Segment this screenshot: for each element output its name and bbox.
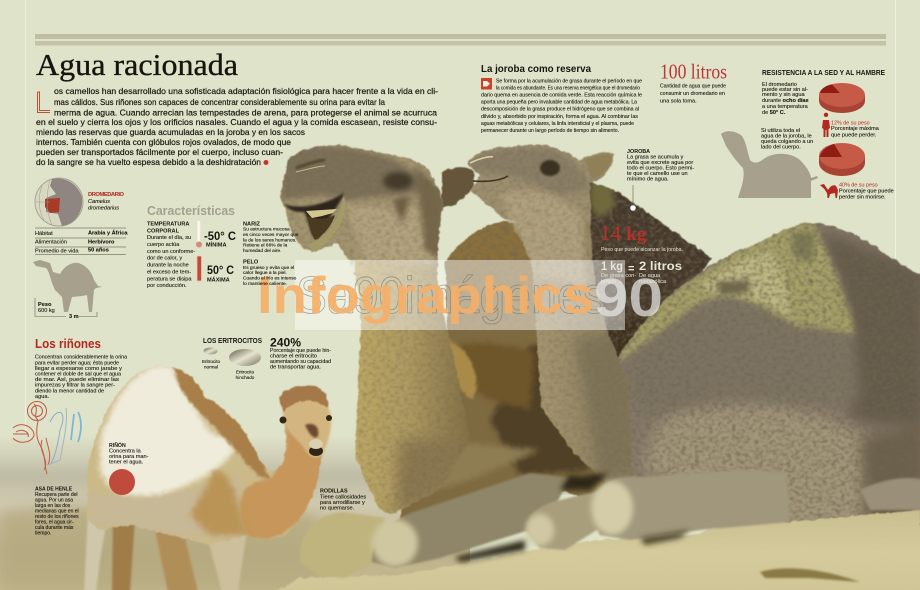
panel: species card: Alimentación xyxy=(35,240,67,246)
stat: 14 kg: De grasa con- xyxy=(601,273,636,279)
text: eight days: durante ocho días xyxy=(762,98,809,104)
stat: 100 litros: consumir un dromedario en xyxy=(660,91,725,97)
neck xyxy=(240,420,325,540)
text: eight days: puede estar sin al- xyxy=(762,87,808,93)
panel: la joroba como reserva: descomposición de la grasa produce el hidrógeno que se combina al xyxy=(481,107,639,113)
panel: la joroba como reserva: Se forma por la acumulación de grasa durante el período en que xyxy=(496,78,642,84)
asa de henle note: ASA DE HENLE xyxy=(35,486,73,492)
icon: dromedary silhouette xyxy=(33,260,102,312)
asa de henle note: larga en las dos xyxy=(35,503,71,509)
riñón note xyxy=(109,441,149,466)
riñón note: RIÑÓN xyxy=(109,441,126,449)
title: Agua racionada xyxy=(36,48,238,82)
icon: red camel xyxy=(820,184,838,198)
icon: swollen erythrocyte xyxy=(229,349,261,366)
icon: arrow marker xyxy=(481,78,492,90)
asa de henle note: agua. Por un asa xyxy=(35,498,73,504)
nariz note: Retiene el 66% de la xyxy=(243,242,288,248)
body temperature text: por conducción. xyxy=(147,283,187,289)
panel: species card: Arabia y África xyxy=(88,230,128,236)
head xyxy=(282,394,331,458)
right camel neck and head xyxy=(460,140,635,490)
nariz note: la de los seres humanos. xyxy=(243,237,296,243)
text: 40% xyxy=(839,182,894,200)
stat: 14 kg: De agua xyxy=(639,273,661,279)
body temperature text: peratura se disipa xyxy=(147,276,192,282)
stat: 14 kg: 2 litros xyxy=(639,261,682,273)
kidney text: para evitar perder agua; ésta puede xyxy=(35,360,119,366)
body temperature text: Durante el día, su xyxy=(147,235,191,241)
riñón note: orina para man- xyxy=(109,454,149,460)
left camel ear tuft xyxy=(442,167,475,208)
panel: resistencia a la sed y al hambre: RESISTENCIA A LA SED Y AL HAMBRE xyxy=(762,70,885,77)
intro text block: do la sangre se ha vuelto espesa debido a la deshidratación xyxy=(36,157,261,167)
panel: la joroba como reserva: permanecer durante un largo período de tiempo sin alimento. xyxy=(481,128,619,134)
asa de henle note: tiempo. xyxy=(35,530,51,536)
panel: características xyxy=(147,204,299,289)
stat: 100 litros: 100 litros xyxy=(660,60,727,84)
stat: 100 litros: una sola toma. xyxy=(660,98,697,104)
panel: los eritrocitos: 240% xyxy=(270,336,301,350)
body temperature text xyxy=(147,222,195,289)
stat: 14 kg: = xyxy=(628,263,634,275)
text: 12% xyxy=(831,120,880,138)
asa de henle note: fores, el agua cir- xyxy=(35,520,74,526)
right camel eye xyxy=(540,160,560,176)
stat: 14 kg: tenida xyxy=(601,279,617,285)
kidney text: Concentran considerablemente la orina xyxy=(35,355,128,361)
panel: los eritrocitos: Eritrocito xyxy=(236,370,255,374)
thermometer: maximum xyxy=(197,256,234,284)
text: eight days: a una temperatura xyxy=(762,104,809,110)
panel: los eritrocitos: normal xyxy=(204,364,218,370)
panel: species card: Peso xyxy=(38,302,52,308)
thermometer: maximum: 50° C xyxy=(207,265,234,277)
left camel nostril xyxy=(296,160,325,168)
pie chart: 40% xyxy=(819,143,865,176)
thermometer: minimum xyxy=(196,221,236,248)
panel: los eritrocitos: hinchado xyxy=(236,375,255,380)
joroba note: La grasa se acumula y xyxy=(627,154,683,160)
kidney text: de mar. Así, puede eliminar las xyxy=(35,377,119,383)
text: 40%: perder sin morirse. xyxy=(839,194,886,200)
body temperature text: como un conforme- xyxy=(147,249,195,255)
icon: human xyxy=(822,113,830,137)
text: 12%: que puede perder. xyxy=(831,132,877,138)
panel: los eritrocitos xyxy=(202,336,331,380)
pointer: joroba xyxy=(630,185,636,211)
panel: la joroba como reserva: La joroba como reserva xyxy=(481,63,591,75)
forelock xyxy=(279,386,328,412)
panel: species card: DROMEDARIO xyxy=(88,192,124,198)
icon: globe xyxy=(35,178,83,226)
nariz note: humedad del aire. xyxy=(243,248,281,254)
panel: species card: Promedio de vida xyxy=(35,248,79,254)
stat: 14 kg: 1 kg xyxy=(601,261,623,273)
watermark: 90 xyxy=(594,268,663,328)
pelo note: lo mantiene caliente. xyxy=(243,281,287,287)
panel: resistencia a la sed y al hambre xyxy=(721,70,894,200)
legs xyxy=(84,510,247,590)
thermometer: maximum: MÁXIMA xyxy=(207,276,230,284)
nariz note: NARIZ xyxy=(243,222,261,228)
rodillas note: no quemarse. xyxy=(320,506,355,512)
text: eight days: mento y sin agua xyxy=(762,92,805,98)
intro text block: os camellos han desarrollado una sofisticada adaptación fisiológica para hacer frente a la vida en cli- xyxy=(54,86,438,96)
nariz note: es cinco veces mayor que xyxy=(243,232,299,238)
text: hump use: lado del cuerpo. xyxy=(761,144,801,150)
joroba note: te que el camello use un xyxy=(627,171,688,177)
text: 12%: 12% de su peso xyxy=(831,120,870,126)
pelo note: PELO xyxy=(243,260,259,266)
eyes and muzzle xyxy=(280,415,332,456)
pelo note: Es grueso y evita que el xyxy=(243,265,294,271)
watermark: Infographics xyxy=(257,267,594,325)
right camel ear xyxy=(585,153,612,180)
icon: normal erythrocyte xyxy=(204,348,218,354)
asa de henle note: medianas que en el xyxy=(35,508,79,514)
body temperature text: cuerpo actúa xyxy=(147,242,180,248)
intro text block: en el suelo y cierra los ojos y los orificios nasales. Cuando el agua y la comida escasean, resiste consu- xyxy=(36,117,437,127)
pelo note: Cuando el frío es intenso xyxy=(243,276,297,282)
body temperature text: dor de calor, y xyxy=(147,256,182,262)
heading: Los riñones xyxy=(35,337,101,351)
photo: two resting camels xyxy=(270,140,920,590)
text: eight days xyxy=(762,82,809,116)
hump of the left camel xyxy=(444,182,712,358)
icon: camel with drooping hump xyxy=(721,131,818,198)
white fleece xyxy=(100,365,236,498)
diagram: nephron xyxy=(13,402,81,474)
left camel neck and head xyxy=(275,140,475,520)
riñón note: Concentra la xyxy=(109,448,142,454)
panel: los eritrocitos: Eritrocito xyxy=(202,359,221,364)
drop cap xyxy=(38,92,50,112)
kidney text: agua. xyxy=(35,394,49,400)
panel: species card: Herbívoro xyxy=(88,240,115,246)
intro text block xyxy=(36,86,438,167)
body temperature text: durante la noche xyxy=(147,263,189,269)
heading: Características xyxy=(147,204,235,218)
rodillas note: para arrodillarse y xyxy=(320,500,365,506)
stat: 100 litros xyxy=(660,60,727,104)
text: hump use: queda colgando a un xyxy=(761,139,813,145)
text: 12%: Porcentaje máxima xyxy=(831,126,880,132)
intro text block: internos. También cuenta con glóbulos rojos ovalados, de modo que xyxy=(36,137,291,147)
joroba note: todo el cuerpo. Esto permi- xyxy=(627,166,694,172)
text: hump use: Si utiliza toda el xyxy=(761,128,800,134)
kidney text xyxy=(35,355,128,400)
rodillas note: Tiene callosidades xyxy=(320,494,366,500)
knees and legs xyxy=(300,470,920,578)
kidney text: impurezas y filtrar la sangre per- xyxy=(35,383,115,389)
text: hump use xyxy=(761,128,813,150)
watermark: Sa90imágenes xyxy=(296,267,606,325)
riñón note: tener el agua. xyxy=(109,460,144,466)
right camel mouth xyxy=(473,176,508,181)
intro text block: merma de agua. Cuando arrecian las tempestades de arena, para protegerse el animal se acurruca xyxy=(54,108,437,118)
panel: los eritrocitos: aumentando su capacidad xyxy=(270,359,331,365)
left camel eye xyxy=(383,172,413,190)
text: hump use: agua de la joroba, le xyxy=(761,134,812,140)
stat: 14 kg: metabólica xyxy=(639,279,667,285)
body of the left camel xyxy=(400,330,610,520)
panel: species card: 3 m xyxy=(69,314,79,320)
joroba note: JOROBA xyxy=(627,149,650,155)
panel: los eritrocitos: charse el eritrocito xyxy=(270,354,317,360)
text: 40%: Porcentaje que puede xyxy=(839,188,894,194)
nariz note xyxy=(243,222,299,254)
body of the right camel xyxy=(618,222,920,526)
photo: young camel xyxy=(80,360,332,590)
panel: species card: dromedarius xyxy=(88,206,119,212)
text: eight days: El dromedario xyxy=(762,82,797,88)
intro text block: pueden ser transportados fácilmente por el cuerpo, incluso cuan- xyxy=(36,147,283,157)
thermometer: minimum: MÍNIMA xyxy=(206,240,227,248)
left camel mouth xyxy=(284,193,344,240)
panel: la joroba como reserva: dario quema en ausencia de comida verde. Esta reacción química le xyxy=(481,92,642,98)
kidney text: diendo la menor cantidad de xyxy=(35,388,104,394)
thermometer: minimum: -50° C xyxy=(204,231,236,243)
asa de henle note: cula durante más xyxy=(35,525,74,531)
intro text block: miendo las reservas que guarda acumuladas en la joroba y en los sacos xyxy=(36,127,305,137)
asa de henle note: Recupera parte del xyxy=(35,492,78,498)
body temperature text: el exceso de tem- xyxy=(147,269,191,275)
icon: kidney marker xyxy=(109,469,135,495)
panel: la joroba como reserva xyxy=(481,63,642,134)
panel: species card: Hábitat xyxy=(35,231,53,237)
panel: los riñones xyxy=(13,337,149,536)
asa de henle note xyxy=(35,486,79,536)
background: desert haze and ground xyxy=(0,435,470,590)
panel: los eritrocitos: de transportar agua. xyxy=(270,364,321,370)
panel: la joroba como reserva: aguas metabólicas y celulares, la linfa intersticial y el plasma, puede xyxy=(481,121,634,127)
joroba note: mínimo de agua. xyxy=(627,176,669,182)
pelo note xyxy=(243,260,297,287)
panel: la joroba como reserva: dilvido y, absorbido por inspiración, forma el agua. Al combinar las xyxy=(481,114,638,120)
rodillas note xyxy=(320,488,366,512)
joroba note: evita que excrete agua por xyxy=(627,160,693,166)
panel: los eritrocitos: LOS ERITROCITOS xyxy=(203,338,262,345)
joroba note xyxy=(627,149,694,182)
body temperature text: TEMPERATURA xyxy=(147,222,189,228)
nariz note: Su estructura mucosa xyxy=(243,227,290,233)
panel: species card: 50 años xyxy=(88,248,109,254)
asa de henle note: resto de los riñones xyxy=(35,514,79,520)
panel: la joroba como reserva: la comida es abundante. Es una reserva energética que el dromedario xyxy=(496,85,640,91)
body temperature text: CORPORAL xyxy=(147,228,180,234)
pelo note: calor llegue a la piel. xyxy=(243,270,287,276)
stat: 14 kg: 14 kg xyxy=(600,221,647,245)
rodillas note: RODILLAS xyxy=(320,488,348,494)
text: 40%: 40% de su peso xyxy=(839,182,878,188)
text: eight days: de 50° C. xyxy=(762,110,786,116)
panel: species card: Camelus xyxy=(88,199,110,205)
sand xyxy=(270,510,920,590)
stat: 14 kg: Peso que puede alcanzar la joroba. xyxy=(601,247,683,253)
brown back xyxy=(173,365,270,480)
panel: species card xyxy=(33,178,128,320)
panel: la joroba como reserva: aporta una pequeña pero invaluable cantidad de agua metabólica. La xyxy=(481,100,638,106)
kidney text: llegar a espesarse como jarabe y xyxy=(35,366,122,372)
intro text block: mas cálidos. Sus riñones son capaces de concentrar considerablemente su orina para evitar la xyxy=(54,97,385,107)
stat: 14 kg xyxy=(600,221,683,285)
pie chart: 12% xyxy=(819,83,865,113)
stat: 100 litros: Cantidad de agua que puede xyxy=(660,84,726,90)
panel: los eritrocitos: Porcentaje que puede hin- xyxy=(270,348,331,354)
panel: species card: 600 kg xyxy=(38,308,55,314)
kidney text: contener el doble de sal que el agua xyxy=(35,372,122,378)
